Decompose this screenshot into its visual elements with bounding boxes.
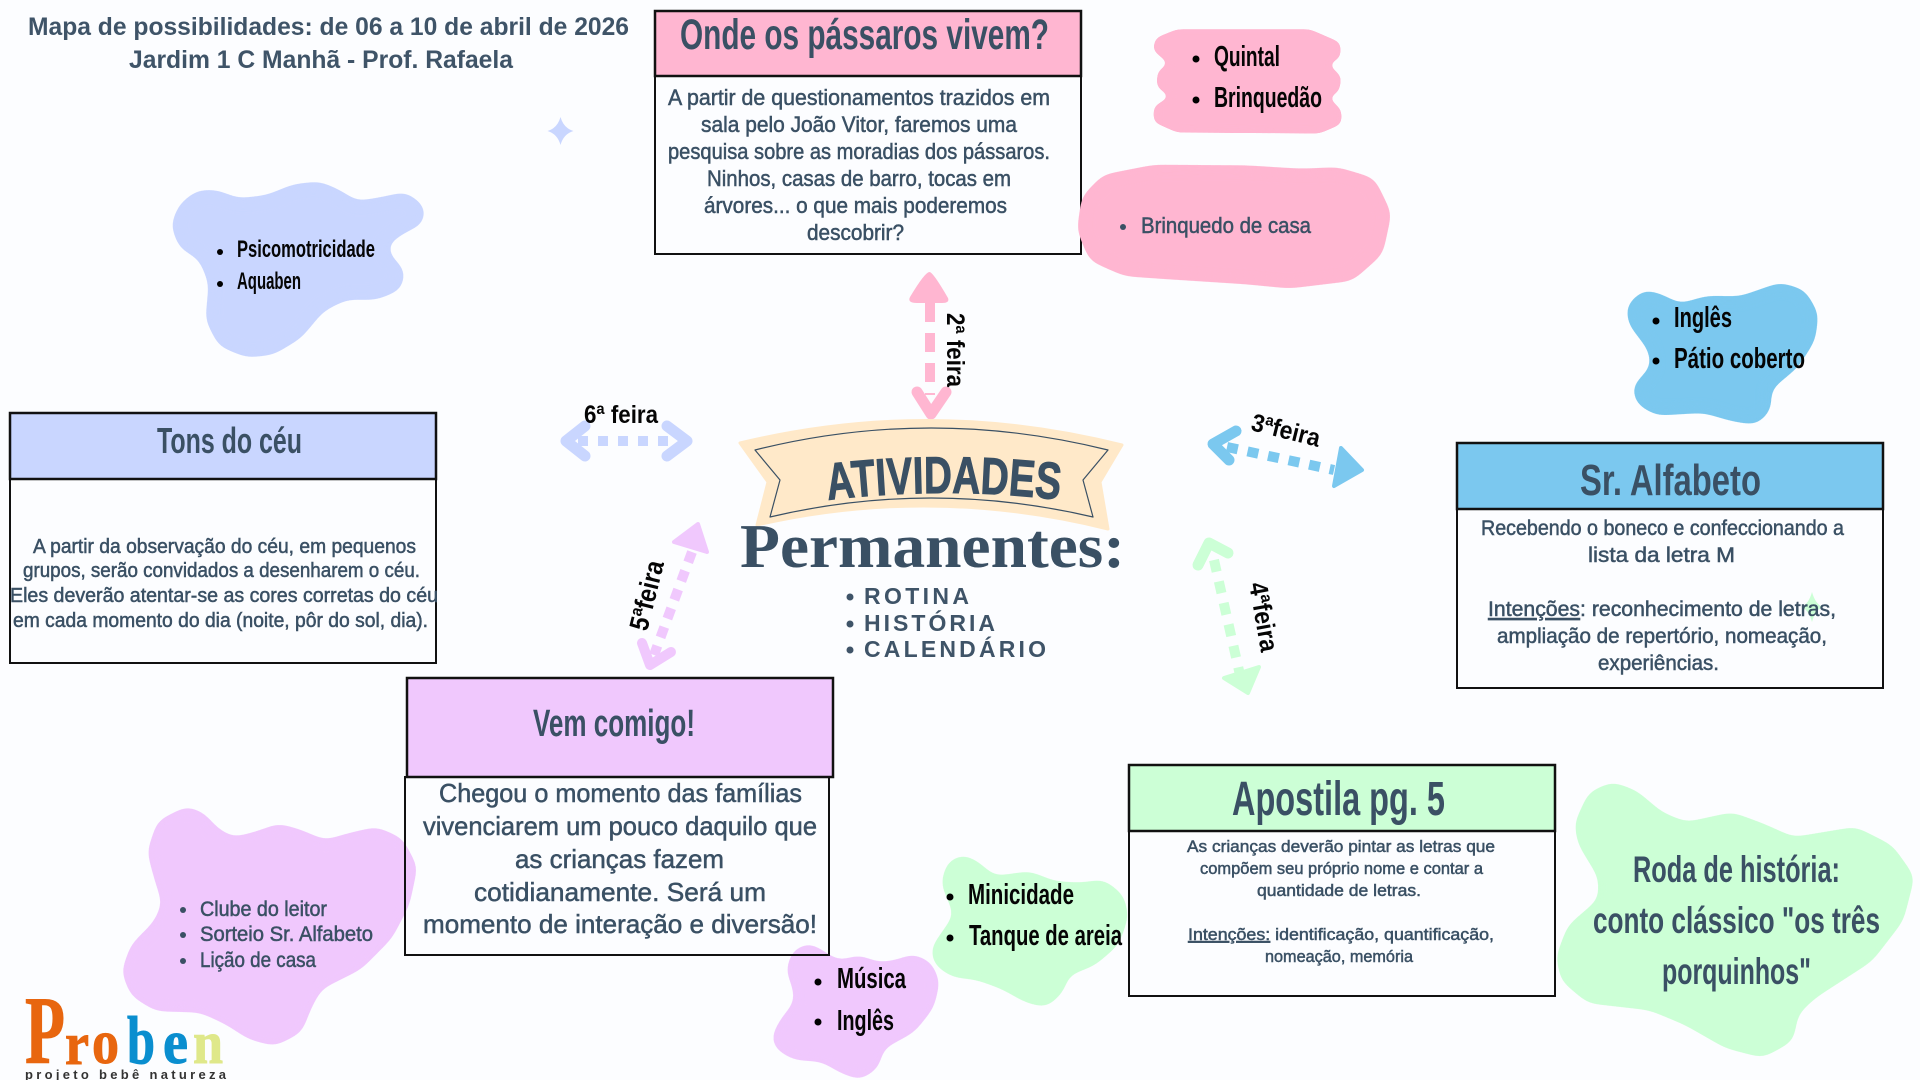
label: 6ª feira: 6ª feira bbox=[584, 401, 659, 429]
panel: Apostila pg. 5: As crianças deverão pintar as letras que bbox=[1187, 837, 1495, 856]
label: 3ª feira: 3ªfeira bbox=[1249, 409, 1324, 453]
arrow: terça-feira bbox=[1213, 431, 1362, 486]
arrow: quinta-feira bbox=[642, 524, 707, 665]
list: clube do leitor: Lição de casa bbox=[200, 949, 316, 972]
list: clube do leitor bbox=[180, 898, 373, 972]
panel: Sr. Alfabeto: experiências. bbox=[1598, 652, 1719, 675]
icon: blue sparkle bbox=[548, 117, 574, 145]
blob: clube do leitor bbox=[122, 806, 417, 1046]
panel: Apostila pg. 5: compõem seu próprio nome e contar a bbox=[1200, 859, 1484, 878]
list: brinquedo de casa: Brinquedo de casa bbox=[1141, 213, 1312, 238]
list: clube do leitor: Sorteio Sr. Alfabeto bbox=[200, 923, 373, 946]
list: inglês pátio bbox=[1652, 302, 1805, 375]
panel: Vem comigo: cotidianamente. Será um bbox=[474, 877, 766, 907]
arrow: quarta-feira bbox=[1198, 543, 1259, 693]
list: rotina: ROTINA bbox=[864, 583, 969, 609]
panel: Sr. Alfabeto: Sr. Alfabeto bbox=[1580, 456, 1761, 505]
icon: green sparkle bbox=[1802, 592, 1822, 622]
blob: inglês pátio bbox=[1627, 283, 1818, 425]
panel: Vem comigo bbox=[405, 678, 833, 955]
arrow: segunda-feira bbox=[909, 272, 948, 414]
panel: Onde os pássaros vivem: A partir de questionamentos trazidos em bbox=[668, 85, 1050, 110]
logo: proben: n bbox=[193, 1010, 223, 1076]
panel: Apostila pg. 5: nomeação, memória bbox=[1265, 947, 1414, 966]
list: música inglês bbox=[814, 963, 907, 1037]
blob: música inglês bbox=[772, 943, 940, 1080]
logo: proben: e bbox=[163, 1009, 188, 1077]
panel: Apostila pg. 5 bbox=[1129, 765, 1555, 996]
list: clube do leitor: Clube do leitor bbox=[200, 898, 327, 921]
logo: proben: r bbox=[65, 1011, 89, 1077]
list: minicidade: Minicidade bbox=[968, 879, 1074, 911]
panel: Apostila pg. 5: Intenções: identificação, quantificação, bbox=[1188, 925, 1494, 944]
title bbox=[28, 13, 629, 74]
panel: Vem comigo: Chegou o momento das famílias bbox=[439, 778, 802, 808]
list: minicidade bbox=[946, 879, 1123, 952]
panel: Vem comigo: as crianças fazem bbox=[515, 844, 724, 874]
panel: Vem comigo: Vem comigo! bbox=[533, 703, 695, 745]
list: inglês pátio: Pátio coberto bbox=[1674, 343, 1805, 375]
list: quintal: Quintal bbox=[1214, 41, 1280, 73]
heading: permanentes: Permanentes: bbox=[740, 513, 1125, 581]
list: música inglês: Música bbox=[837, 963, 907, 995]
label: 2ª feira: 2ª feira bbox=[941, 313, 969, 388]
logo: proben bbox=[25, 977, 227, 1080]
panel: Tons do céu: Eles deverão atentar-se as cores corretas do céu bbox=[10, 585, 438, 607]
list: minicidade: Tanque de areia bbox=[969, 920, 1123, 952]
label: 4ª feira: 4ªfeira bbox=[1243, 580, 1285, 654]
panel: Apostila pg. 5: Apostila pg. 5 bbox=[1232, 773, 1445, 826]
panel: Sr. Alfabeto: Intenções: reconhecimento de letras, bbox=[1488, 598, 1836, 621]
panel: Tons do céu: em cada momento do dia (noite, pôr do sol, dia). bbox=[13, 610, 428, 632]
text: roda de história: porquinhos" bbox=[1662, 951, 1811, 992]
panel: Onde os pássaros vivem bbox=[655, 11, 1081, 254]
panel: Onde os pássaros vivem: árvores... o que mais poderemos bbox=[704, 193, 1007, 218]
panel: Onde os pássaros vivem: descobrir? bbox=[807, 220, 904, 245]
title: Jardim 1 C Manhã - Prof. Rafaela bbox=[129, 46, 514, 74]
text: roda de história bbox=[1593, 849, 1880, 992]
list: quintal: Brinquedão bbox=[1214, 82, 1322, 114]
panel: Apostila pg. 5: quantidade de letras. bbox=[1257, 881, 1421, 900]
blob: minicidade bbox=[931, 855, 1128, 1007]
list: psicomotricidade: Aquaben bbox=[237, 268, 301, 295]
list: inglês pátio: Inglês bbox=[1674, 302, 1732, 334]
arrow: sexta-feira bbox=[566, 426, 687, 456]
list: psicomotricidade bbox=[217, 236, 375, 295]
title: Mapa de possibilidades: de 06 a 10 de abril de 2026 bbox=[28, 13, 629, 41]
list: música inglês: Inglês bbox=[837, 1005, 894, 1037]
blob: psicomotricidade bbox=[171, 182, 425, 357]
panel: Onde os pássaros vivem: Onde os pássaros vivem? bbox=[680, 11, 1049, 59]
logo: proben: b bbox=[127, 1002, 155, 1078]
list: quintal bbox=[1192, 41, 1322, 114]
panel: Vem comigo: vivenciarem um pouco daquilo que bbox=[423, 811, 817, 841]
blob: brinquedo de casa bbox=[1077, 165, 1391, 288]
label: 5ª feira: 5ªfeira bbox=[624, 556, 670, 633]
panel: Sr. Alfabeto: lista da letra M bbox=[1588, 544, 1735, 567]
panel: Tons do céu: grupos, serão convidados a desenharem o céu. bbox=[23, 560, 420, 582]
panel: Tons do céu bbox=[10, 413, 438, 663]
blob: roda de história bbox=[1556, 782, 1914, 1058]
panel: Sr. Alfabeto bbox=[1457, 443, 1883, 688]
panel: Onde os pássaros vivem: sala pelo João Vitor, faremos uma bbox=[701, 112, 1018, 137]
list: psicomotricidade: Psicomotricidade bbox=[237, 236, 375, 263]
panel: Onde os pássaros vivem: Ninhos, casas de barro, tocas em bbox=[707, 166, 1011, 191]
banner: atividades: ATIVIDADES bbox=[828, 456, 1060, 500]
panel: Tons do céu: Tons do céu bbox=[157, 420, 302, 461]
panel: Tons do céu: A partir da observação do céu, em pequenos bbox=[33, 536, 416, 558]
panel: Vem comigo: momento de interação e diversão! bbox=[423, 909, 817, 939]
logo: proben: o bbox=[92, 1009, 119, 1077]
banner: atividades bbox=[738, 419, 1124, 530]
panel: Sr. Alfabeto: Recebendo o boneco e confeccionando a bbox=[1481, 517, 1844, 540]
list: rotina: CALENDÁRIO bbox=[864, 635, 1046, 662]
list: rotina: HISTÓRIA bbox=[864, 609, 995, 636]
panel: Onde os pássaros vivem: pesquisa sobre as moradias dos pássaros. bbox=[668, 139, 1050, 164]
list: rotina bbox=[846, 583, 1046, 662]
blob: quintal bbox=[1153, 29, 1341, 133]
panel: Sr. Alfabeto: ampliação de repertório, nomeação, bbox=[1497, 625, 1827, 648]
